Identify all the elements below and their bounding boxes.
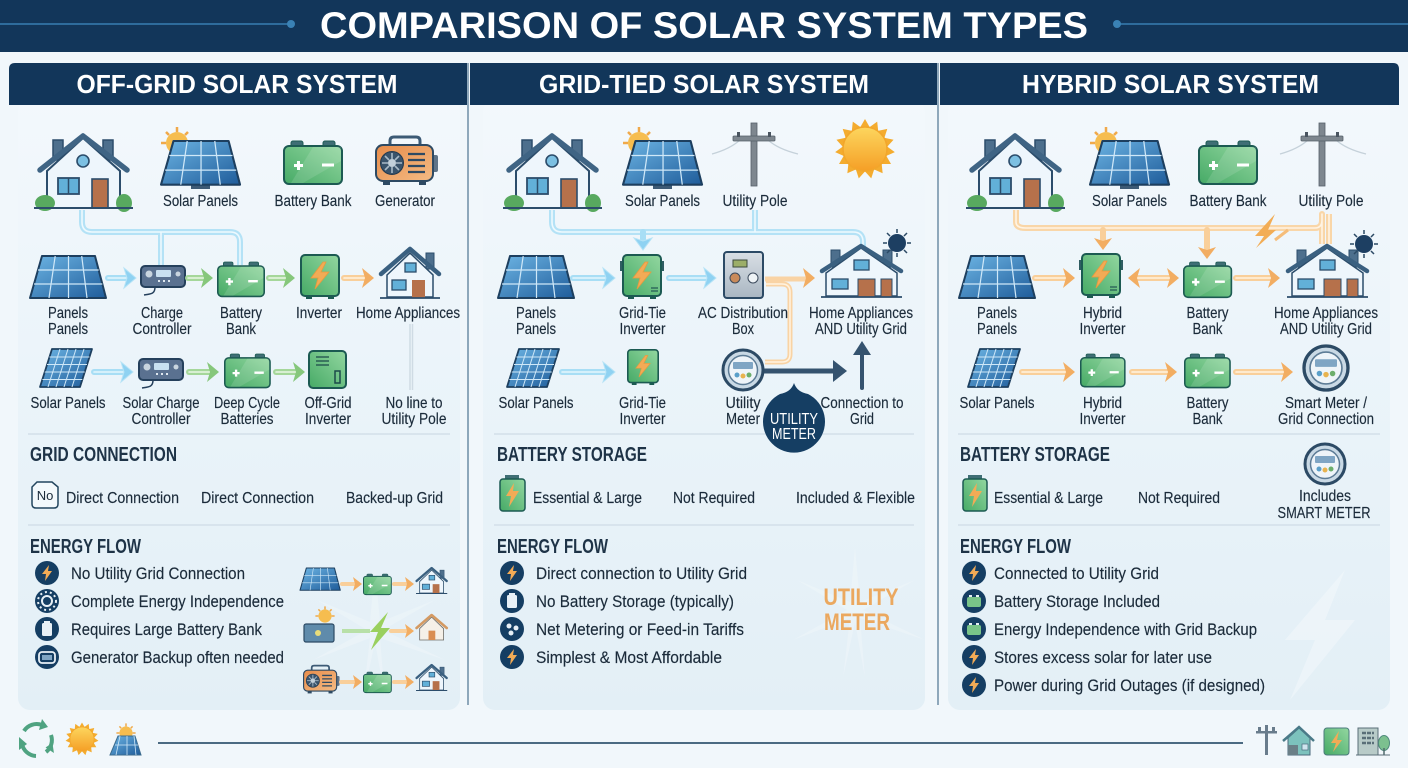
label: Off-Grid — [304, 395, 352, 412]
icon: solar panels with sun — [161, 127, 240, 189]
mini flow: battery with sun to bolt to house — [304, 606, 447, 650]
orange utility meter watermark: UTILITY — [824, 584, 898, 611]
label — [619, 395, 666, 428]
icon: panels — [959, 256, 1035, 298]
arrow — [189, 362, 219, 382]
icon: sun — [835, 110, 905, 178]
arrow — [669, 268, 716, 288]
icon: building and tree — [1356, 728, 1390, 755]
label — [382, 395, 447, 428]
energy flow list: Stores excess solar for later use — [994, 648, 1212, 667]
label — [214, 395, 280, 428]
text: Essential & Large — [533, 490, 642, 507]
icon: smart meter — [1305, 444, 1345, 484]
icon: battery bank — [218, 262, 264, 296]
text: Not Required — [1138, 490, 1220, 507]
label — [304, 395, 352, 428]
arrow: up to house — [853, 341, 871, 388]
arrow: down to inverter — [1094, 230, 1112, 250]
label: Utility — [726, 395, 760, 412]
label: Battery — [220, 305, 262, 322]
label — [132, 305, 192, 338]
label: Controller — [132, 321, 192, 338]
icon: grid-tie inverter — [620, 255, 664, 299]
battery storage heading: BATTERY STORAGE — [497, 443, 647, 466]
energy flow list: Connected to Utility Grid — [994, 564, 1159, 583]
icon: house — [1283, 727, 1314, 755]
energy flow list — [500, 561, 747, 669]
icon: utility pole — [1280, 123, 1366, 186]
label: Inverter — [1080, 411, 1126, 428]
icon: home and grid house — [821, 246, 902, 297]
label: Grid — [850, 411, 874, 428]
callout: utility meter: METER — [772, 426, 816, 443]
label — [820, 395, 904, 428]
label: AND Utility Grid — [815, 321, 907, 338]
label — [220, 305, 262, 338]
arrow — [1022, 362, 1075, 382]
energy flow list: Net Metering or Feed-in Tariffs — [536, 620, 744, 639]
energy flow list: Battery Storage Included — [994, 592, 1160, 611]
label: Home Appliances — [1274, 305, 1378, 322]
connector lines — [1016, 210, 1329, 244]
icon: smart meter — [1304, 346, 1348, 390]
icon: panels — [30, 256, 106, 298]
arrow: down to battery — [1198, 230, 1216, 259]
heading text: GRID-TIED SOLAR SYSTEM — [539, 69, 869, 99]
flare — [313, 568, 445, 698]
label: No line to — [386, 395, 443, 412]
energy flow list: Energy Independence with Grid Backup — [994, 620, 1257, 639]
label — [1278, 395, 1374, 428]
label: Panels — [48, 321, 88, 338]
icon: skew solar panel — [40, 349, 92, 387]
label — [1080, 305, 1126, 338]
icon: off-grid inverter — [309, 351, 346, 388]
label: Bank — [1192, 411, 1223, 428]
label — [48, 305, 88, 338]
label — [619, 305, 666, 338]
icon: generator — [376, 137, 438, 185]
icon: utility meter — [723, 350, 763, 390]
text: Backed-up Grid — [346, 490, 443, 507]
label: Inverter — [1080, 321, 1126, 338]
label: Connection to — [820, 395, 904, 412]
footer — [19, 717, 1390, 756]
icon: house — [966, 136, 1065, 212]
label — [809, 305, 913, 338]
label: Battery Bank — [274, 193, 352, 210]
label: Utility Pole — [722, 193, 788, 210]
icon: battery bank — [1199, 141, 1257, 184]
label: Panels — [516, 305, 556, 322]
no-grid line — [410, 324, 412, 390]
arrow — [1236, 268, 1280, 288]
text: Essential & Large — [994, 490, 1103, 507]
label — [122, 395, 200, 428]
text: Direct Connection — [66, 490, 179, 507]
label: Panels — [516, 321, 556, 338]
icon: solar charge controller — [139, 359, 183, 388]
icon: charge controller — [141, 266, 185, 295]
arrow — [1236, 362, 1293, 382]
panel: hybrid solar system — [940, 63, 1399, 710]
heading text: OFF-GRID SOLAR SYSTEM — [76, 69, 398, 99]
title banner — [0, 0, 1408, 52]
icon: house — [34, 136, 133, 212]
text: Included & Flexible — [796, 490, 915, 507]
icon: battery bank — [1185, 354, 1230, 388]
arrow — [803, 268, 815, 288]
arrow — [344, 268, 374, 288]
icon: utility pole — [712, 123, 798, 186]
icon: solar panel with sun — [110, 723, 141, 755]
battery storage heading: BATTERY STORAGE — [960, 443, 1110, 466]
energy flow list: Requires Large Battery Bank — [71, 620, 262, 639]
footer line — [158, 742, 1243, 744]
label: Batteries — [220, 411, 274, 428]
heading bar — [470, 63, 937, 105]
energy flow heading: ENERGY FLOW — [497, 535, 608, 558]
label: Deep Cycle — [214, 395, 280, 412]
energy flow list: Simplest & Most Affordable — [536, 648, 722, 667]
panel: grid-tied solar system — [470, 63, 937, 710]
icon: small dark sun — [1350, 230, 1378, 258]
label: Utility Pole — [1298, 193, 1364, 210]
label: Bank — [1192, 321, 1223, 338]
label — [516, 305, 556, 338]
label: Solar Charge — [122, 395, 200, 412]
label: Utility Pole — [382, 411, 447, 428]
energy flow list: Generator Backup often needed — [71, 648, 284, 667]
icon: hybrid inverter battery — [1081, 354, 1125, 387]
label: Panels — [977, 321, 1017, 338]
energy flow list: Complete Energy Independence — [71, 592, 284, 611]
label: Solar Panels — [30, 395, 106, 412]
icon: solar panels with sun — [623, 127, 702, 189]
label — [1186, 305, 1228, 338]
icon: battery — [1324, 728, 1349, 755]
label — [698, 305, 788, 338]
energy flow heading: ENERGY FLOW — [960, 535, 1071, 558]
arrow: two-way — [1128, 268, 1179, 288]
label: Home Appliances — [356, 305, 460, 322]
icon: skew solar panel — [968, 349, 1020, 387]
label: Battery — [1186, 305, 1228, 322]
arrow — [1132, 362, 1177, 382]
label: Home Appliances — [809, 305, 913, 322]
label: AC Distribution — [698, 305, 788, 322]
energy flow list — [35, 561, 284, 669]
label: Grid-Tie — [619, 305, 666, 322]
label: Meter — [726, 411, 761, 428]
label: Inverter — [620, 321, 666, 338]
label: Solar Panels — [498, 395, 574, 412]
connector lines — [552, 210, 863, 248]
label: Solar Panels — [625, 193, 700, 210]
icon: recycling arrows — [19, 719, 56, 756]
heading bar — [9, 63, 467, 105]
label: Inverter — [620, 411, 666, 428]
label — [1080, 395, 1126, 428]
mini flow: panel to battery to house — [300, 568, 447, 595]
panel background — [483, 100, 925, 710]
energy flow list: Power during Grid Outages (if designed) — [994, 676, 1265, 695]
label: Battery Bank — [1190, 193, 1267, 210]
connector lines from house — [82, 210, 240, 265]
icon: inverter — [301, 255, 339, 299]
icon: panels — [498, 256, 574, 298]
label: Hybrid — [1083, 395, 1122, 412]
energy flow list: No Utility Grid Connection — [71, 564, 245, 583]
orange connector — [765, 279, 809, 362]
orange utility meter watermark: METER — [824, 609, 890, 636]
icon: AC distribution box — [724, 252, 763, 298]
label: Box — [732, 321, 754, 338]
heading text: HYBRID SOLAR SYSTEM — [1022, 69, 1319, 99]
panel background — [948, 100, 1390, 710]
text: SMART METER — [1278, 505, 1370, 522]
arrow — [94, 362, 133, 382]
text — [1278, 488, 1370, 522]
arrow — [573, 268, 615, 288]
grid connection heading: GRID CONNECTION — [30, 443, 177, 466]
energy flow heading: ENERGY FLOW — [30, 535, 141, 558]
arrow: down to inverter — [634, 232, 652, 250]
flare — [793, 548, 925, 678]
mini flow: generator to battery to house — [304, 665, 447, 693]
text: Includes — [1299, 488, 1351, 505]
icon: solar panels with sun — [1090, 127, 1169, 189]
icon: hybrid inverter — [1079, 254, 1123, 298]
label: Charge — [141, 305, 183, 322]
label: Smart Meter / — [1285, 395, 1367, 412]
icon: home and grid house — [1287, 246, 1368, 297]
icon: grid-tie inverter — [628, 350, 658, 385]
label — [977, 305, 1017, 338]
icon: deep cycle batteries — [225, 354, 270, 388]
label — [1274, 305, 1378, 338]
label: Solar Panels — [163, 193, 238, 210]
energy flow list: Direct connection to Utility Grid — [536, 564, 747, 583]
icon: no badge: No — [37, 488, 53, 503]
icon: battery bank — [284, 141, 342, 184]
label: Solar Panels — [960, 395, 1034, 412]
text: Direct Connection — [201, 490, 314, 507]
icon: home appliances house — [380, 249, 440, 298]
label: Generator — [375, 193, 436, 210]
label — [726, 395, 761, 428]
arrow — [562, 362, 615, 382]
label: Grid-Tie — [619, 395, 666, 412]
column divider lines — [468, 63, 938, 705]
icon: no badge — [32, 482, 58, 508]
arrow — [1035, 268, 1075, 288]
label: Inverter — [296, 305, 343, 322]
label — [1186, 395, 1228, 428]
label: Inverter — [305, 411, 352, 428]
arrow — [188, 268, 213, 288]
orange utility meter watermark — [824, 584, 898, 636]
arrow: dark line from meter — [762, 360, 847, 382]
icon: tall battery — [500, 475, 525, 511]
icon: lightning bolt — [1255, 214, 1288, 248]
arrow — [108, 268, 136, 288]
label: AND Utility Grid — [1280, 321, 1372, 338]
label: Hybrid — [1083, 305, 1122, 322]
label: Bank — [226, 321, 257, 338]
label: Battery — [1186, 395, 1228, 412]
label: Solar Panels — [1092, 193, 1167, 210]
energy flow list — [962, 561, 1265, 697]
energy flow list: No Battery Storage (typically) — [536, 592, 734, 611]
callout: utility meter — [763, 383, 825, 453]
arrow — [269, 268, 295, 288]
label: Controller — [132, 411, 191, 428]
icon: sun — [66, 717, 104, 755]
icon: pole — [1256, 725, 1277, 755]
flare bolt — [1285, 570, 1355, 700]
icon: battery bank — [1184, 262, 1231, 297]
panel: off-grid solar system — [9, 63, 467, 710]
icon: house — [503, 136, 602, 212]
callout: utility meter: UTILITY — [770, 411, 818, 428]
arrow — [276, 362, 305, 382]
label: Panels — [48, 305, 88, 322]
panel background — [18, 100, 460, 710]
label: Panels — [977, 305, 1017, 322]
label: Grid Connection — [1278, 411, 1374, 428]
title: COMPARISON OF SOLAR SYSTEM TYPES — [320, 5, 1088, 46]
text: Not Required — [673, 490, 755, 507]
icon: small dark sun — [883, 229, 911, 257]
icon: tall battery — [963, 475, 987, 511]
icon: skew solar panel — [507, 349, 559, 387]
heading bar — [940, 63, 1399, 105]
